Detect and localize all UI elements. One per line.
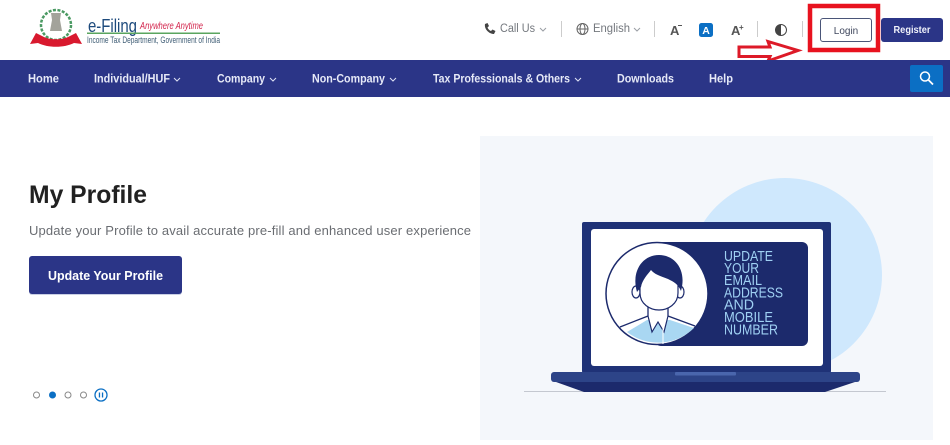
logo department line: Income Tax Department, Government of India xyxy=(87,35,220,46)
top utility bar xyxy=(485,21,803,38)
laptop xyxy=(551,222,860,392)
logo xyxy=(30,10,220,47)
default font size xyxy=(699,23,713,37)
register button: Register xyxy=(894,25,931,36)
profile banner xyxy=(655,242,808,346)
search button xyxy=(910,65,943,92)
call us: Call Us xyxy=(500,23,535,35)
icon: chevron xyxy=(540,28,546,31)
banner text: UPDATE xyxy=(724,249,773,265)
logo tagline: Anywhere Anytime xyxy=(139,21,203,32)
icon: contrast xyxy=(776,24,786,36)
update profile button xyxy=(29,256,182,295)
navigation bar xyxy=(0,60,950,97)
laptop screen xyxy=(591,229,823,366)
banner text: EMAIL xyxy=(724,273,762,289)
avatar xyxy=(606,242,708,344)
nav items: Home xyxy=(28,72,59,86)
nav items: Individual/HUF xyxy=(94,72,170,86)
laptop lid xyxy=(582,222,831,373)
register button xyxy=(881,18,943,42)
logo wordmark: e-Filing xyxy=(88,16,137,36)
update profile button: Update Your Profile xyxy=(48,268,163,283)
nav items: Company xyxy=(217,72,265,86)
nav items xyxy=(28,72,733,86)
illustration panel xyxy=(480,136,933,440)
ground line xyxy=(524,391,886,392)
icon: globe xyxy=(577,24,588,34)
banner text: ADDRESS xyxy=(724,286,783,302)
nav items: Tax Professionals & Others xyxy=(433,72,570,86)
arrow pointing to login xyxy=(739,42,798,61)
login button xyxy=(820,18,872,42)
increase font size: A xyxy=(731,23,741,38)
banner text xyxy=(724,249,783,338)
nav items: Help xyxy=(709,72,733,86)
banner text: AND xyxy=(724,298,754,314)
icon: chevron xyxy=(634,28,640,31)
icon: pause xyxy=(95,389,107,401)
hero description: Update your Profile to avail accurate pre-fill and enhanced user experience xyxy=(29,223,471,238)
banner text: YOUR xyxy=(724,261,759,277)
login button: Login xyxy=(834,26,858,37)
laptop base xyxy=(551,372,860,392)
banner text: NUMBER xyxy=(724,322,778,338)
nav items: Non-Company xyxy=(312,72,385,86)
default font size: A xyxy=(702,25,710,37)
decrease font size: A xyxy=(670,23,680,38)
hero heading: My Profile xyxy=(29,181,147,209)
carousel controls xyxy=(34,389,107,401)
nav items: Downloads xyxy=(617,72,674,86)
language: English xyxy=(593,23,630,35)
background circle xyxy=(688,178,882,372)
top utility bar: + xyxy=(739,23,744,32)
nav chevrons xyxy=(174,78,581,81)
icon: phone xyxy=(485,23,496,34)
icon: emblem xyxy=(30,10,82,47)
highlight box around login xyxy=(810,6,878,50)
banner text: MOBILE xyxy=(724,310,773,326)
